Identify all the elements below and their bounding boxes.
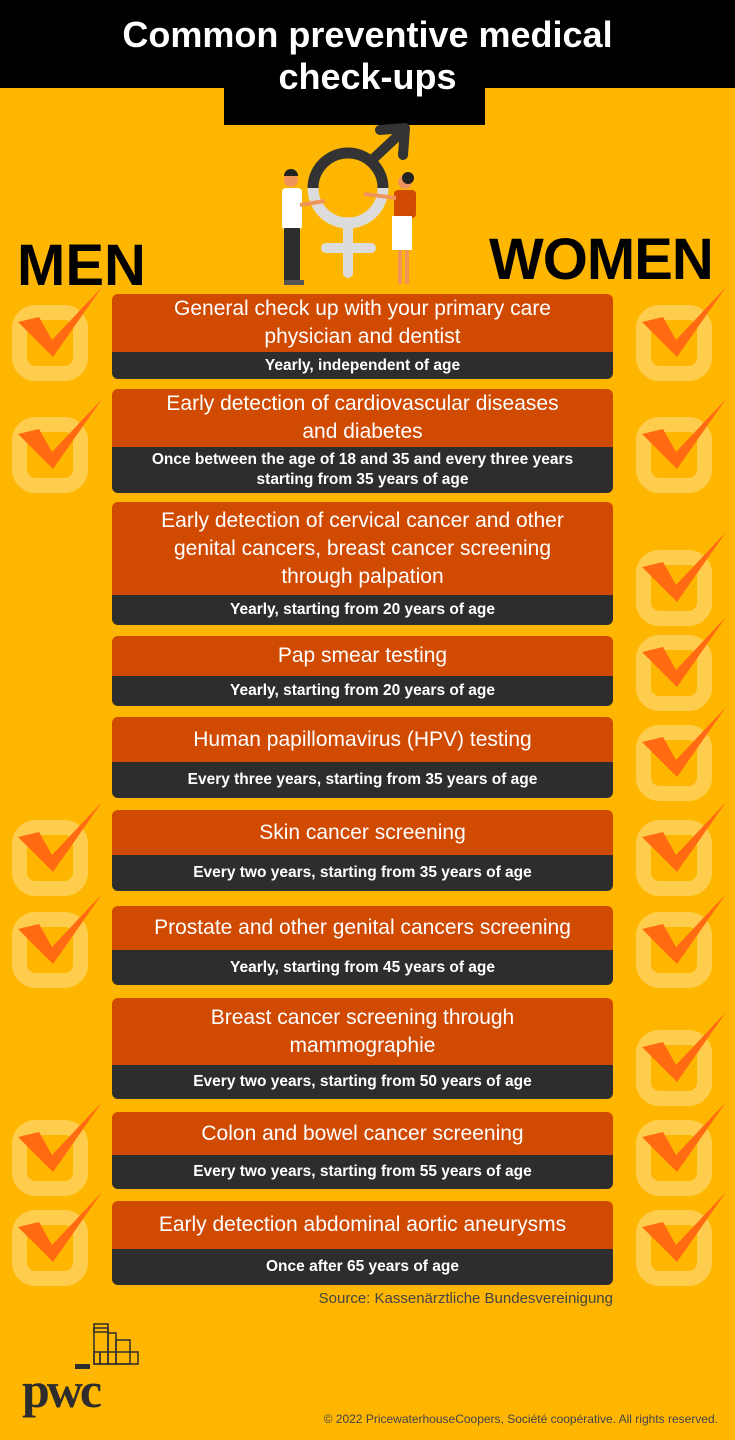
logo: pwc (22, 1323, 139, 1418)
row 3: Yearly, starting from 20 years of age (230, 601, 495, 618)
row 7: Prostate and other genital cancers screening (154, 916, 571, 939)
icon: women checkboxes (636, 287, 726, 1286)
row 4: Yearly, starting from 20 years of age (230, 682, 495, 699)
text: check-ups (278, 56, 457, 97)
row 9: Every two years, starting from 55 years of age (193, 1163, 532, 1180)
title band (0, 0, 735, 88)
logo: pwc: pwc (22, 1362, 99, 1418)
illustration: gender symbol and people (282, 123, 416, 285)
row 2: Early detection of cardiovascular diseases and diabetes (166, 392, 559, 443)
row 2: Once between the age of 18 and 35 and every three years (152, 451, 573, 468)
row 10: Early detection abdominal aortic aneurysms (159, 1213, 566, 1236)
row 3: Early detection of cervical cancer and other genital cancers, breast cancer screening through palpation (161, 508, 564, 588)
row 5: Every three years, starting from 35 years of age (188, 771, 537, 788)
row 5: Human papillomavirus (HPV) testing (193, 728, 532, 750)
heading: WOMEN: WOMEN (489, 227, 713, 292)
row 4 (112, 636, 613, 706)
row 1: Yearly, independent of age (265, 356, 460, 374)
text: Common preventive medical (122, 14, 613, 55)
row 9 (112, 1112, 613, 1189)
row 9: Colon and bowel cancer screening (201, 1122, 524, 1144)
row 8: Every two years, starting from 50 years of age (193, 1073, 532, 1090)
title (224, 60, 485, 125)
heading: MEN: MEN (17, 233, 146, 298)
row 8 (112, 998, 613, 1099)
source: Source: Kassenärztliche Bundesvereinigung (319, 1290, 613, 1307)
row 8: Breast cancer screening through mammographie (211, 1006, 514, 1056)
row 2: starting from 35 years of age (257, 471, 468, 488)
row 1 (112, 294, 613, 379)
row 10: Once after 65 years of age (266, 1258, 459, 1275)
row 6: Skin cancer screening (259, 820, 466, 844)
row 6: Every two years, starting from 35 years of age (193, 864, 532, 881)
row 3 (112, 502, 613, 625)
row 6 (112, 810, 613, 891)
row 7: Yearly, starting from 45 years of age (230, 958, 495, 976)
row 7 (112, 906, 613, 985)
icon: men checkboxes (12, 287, 102, 1286)
copyright: © 2022 PricewaterhouseCoopers, Société coopérative. All rights reserved. (324, 1412, 718, 1426)
row 5 (112, 717, 613, 798)
row 4: Pap smear testing (278, 644, 447, 667)
row 1: General check up with your primary care physician and dentist (174, 297, 551, 348)
row 10 (112, 1201, 613, 1285)
row 2 (112, 389, 613, 493)
